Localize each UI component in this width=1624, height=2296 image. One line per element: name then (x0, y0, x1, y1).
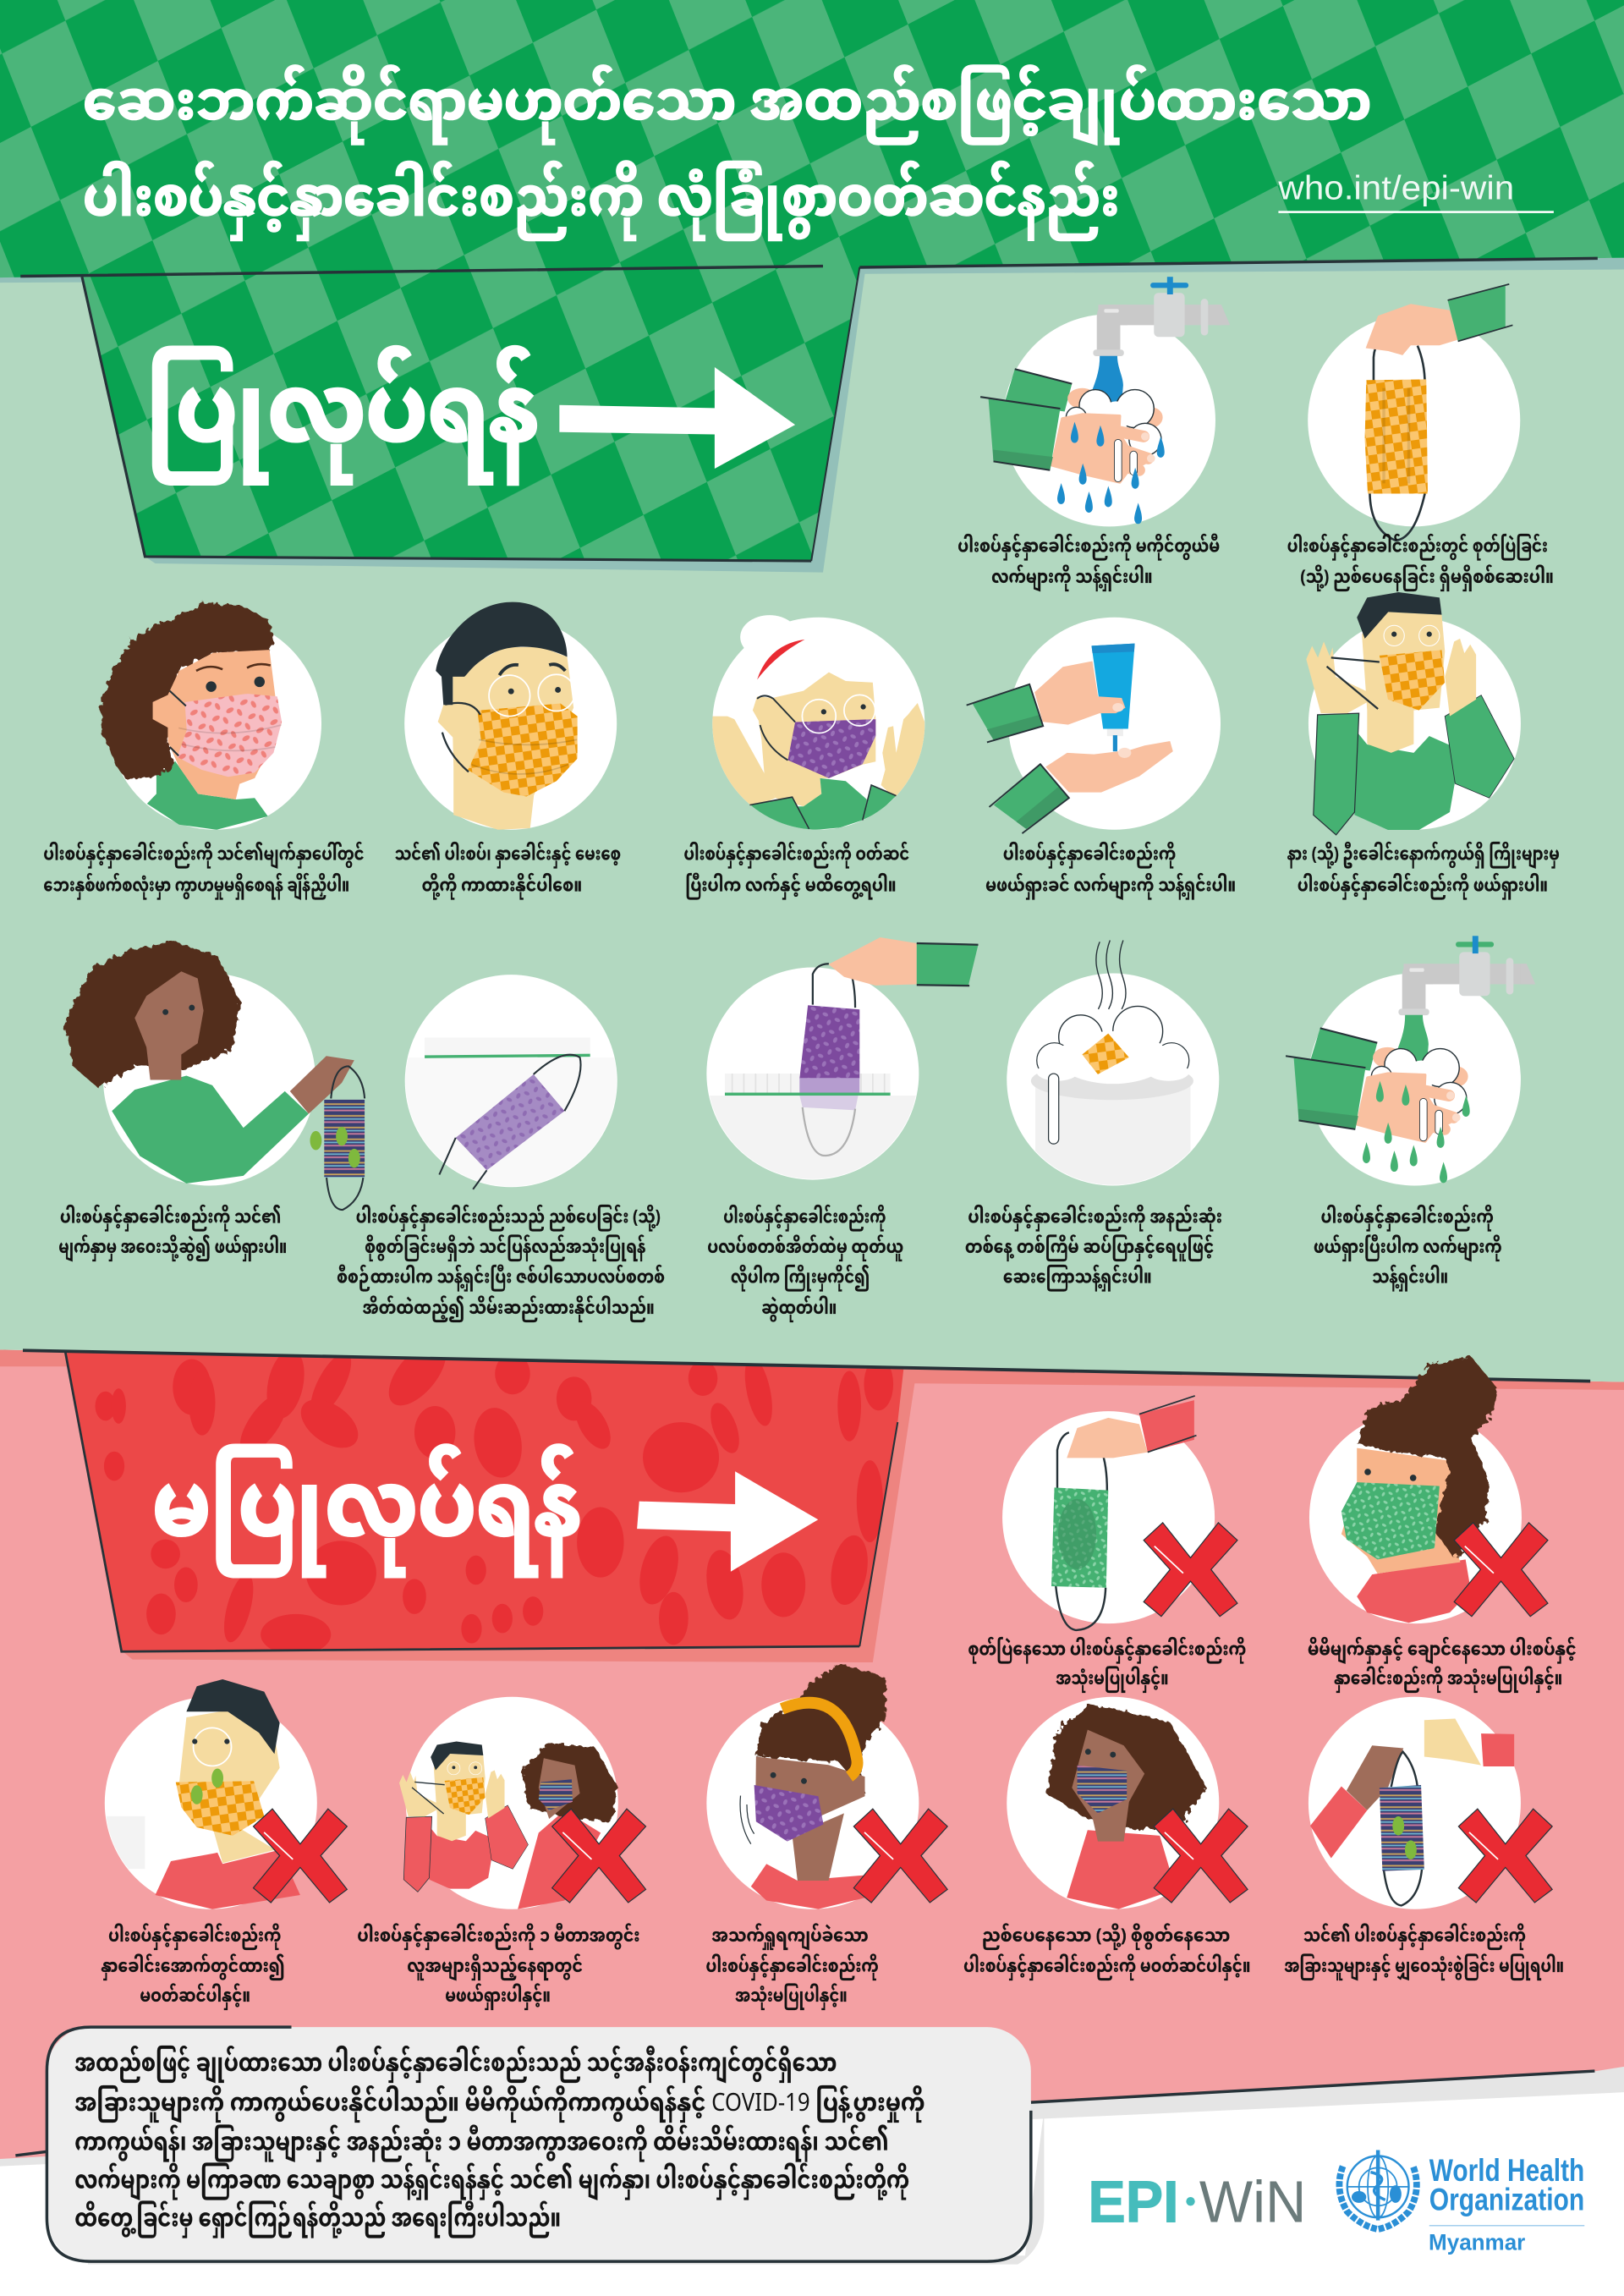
caption: do not wear below nose: မဝတ်ဆင်ပါနှင့်။ (140, 1977, 250, 2018)
illustration: bucket of soapy water (1007, 941, 1219, 1194)
panel: note box: လက်များကို မကြာခဏ သေချာစွာ သန့်ရှင်းရန်နှင့် သင်၏ မျက်နှာ၊ ပါးစပ်နှင့်နှာခေါင်းစည်းတို့ကို (74, 2156, 909, 2211)
flag edge lines (20, 258, 1598, 277)
caption: do not share mask: သင်၏ ပါးစပ်နှင့်နှာခေါင်းစည်းကို (1303, 1917, 1526, 1958)
caption: cover gaps: ဘေးနှစ်ဖက်စလုံးမှာ ကွာဟမှုမရှိစေရန် ချိန်ညှိပါ။ (43, 867, 349, 908)
illustration: mask in zip bag (405, 975, 617, 1189)
illustration: hard to breathe (706, 1664, 919, 1909)
arrow: don't (637, 1471, 818, 1572)
caption: inspect mask: ပါးစပ်နှင့်နှာခေါင်းစည်းတွင် စုတ်ပြဲခြင်း (1287, 528, 1548, 569)
illustration: woman with pink mask (100, 603, 321, 830)
caption: do not wear dirty or damp mask (963, 1917, 1251, 1988)
caption: store in zip bag (337, 1199, 665, 1330)
panel: don't flag (23, 1332, 1590, 1655)
panel: do flag shadow (145, 266, 864, 573)
caption: do not use loose mask: နှာခေါင်းစည်းကို အသုံးမပြုပါနှင့်။ (1334, 1660, 1562, 1700)
caption: wash daily: ဆေးကြောသန့်ရှင်းပါ။ (1003, 1259, 1152, 1299)
logo: EPI-WIN (1088, 2168, 1306, 2234)
panel: note box: ကာကွယ်ရန်၊ အခြားသူများနှင့် အနည်းဆုံး ၁ မီတာအကွာအဝေးကို ထိမ်းသိမ်းထားရန်၊ သင်၏ (74, 2118, 889, 2172)
illustration: pulling mask from bag (706, 937, 979, 1184)
icon: red cross (254, 1809, 347, 1903)
logo: WHO text (1429, 2152, 1584, 2255)
caption: do not wear dirty or damp mask: ပါးစပ်နှင့်နှာခေါင်းစည်းကို မဝတ်ဆင်ပါနှင့်။ (963, 1947, 1251, 1988)
arrow: do (559, 367, 795, 469)
caption: do not share mask: အခြားသူများနှင့် မျှဝေသုံးစွဲခြင်း မပြုရပါ။ (1284, 1947, 1564, 1988)
caption: pull out from bag: ပါးစပ်နှင့်နှာခေါင်းစည်းကို (723, 1199, 886, 1239)
caption: cover nose chin (395, 835, 621, 908)
illustration: person removing straps (1306, 592, 1521, 835)
caption: remove straps (1287, 835, 1560, 908)
caption: clean hands after removing: ဖယ်ရှားပြီးပါက လက်များကို (1314, 1228, 1502, 1269)
caption: do not use torn mask: စုတ်ပြဲနေသော ပါးစပ်နှင့်နှာခေါင်းစည်းကို (968, 1630, 1246, 1671)
icon: red cross (1154, 1809, 1248, 1903)
icon: red cross (1144, 1523, 1237, 1617)
website link: who.int/epi-win (1277, 169, 1514, 206)
caption: remove away from face: မျက်နှာမှ အဝေးသို့ဆွဲ၍ ဖယ်ရှားပါ။ (58, 1228, 287, 1269)
illustration: man with orange mask (404, 602, 617, 830)
caption: do not touch after wearing: ပြီးပါက လက်နှင့် မထိတွေ့ရပါ။ (685, 867, 897, 908)
pink section shadow band (0, 1349, 1624, 1390)
illustration: older woman with purple mask (711, 615, 925, 831)
icon: red cross (1458, 1809, 1552, 1903)
panel: note box: အခြားသူများကို ကာကွယ်ပေးနိုင်ပါသည်။ မိမိကိုယ်ကိုကာကွယ်ရန်နှင့် COVID-19 ပြန့်ပွားမှုကို (74, 2079, 924, 2133)
logo: EPI-WIN: WiN (1199, 2168, 1306, 2234)
caption: do not wear below nose: ပါးစပ်နှင့်နှာခေါင်းစည်းကို (108, 1917, 281, 1958)
logo: WHO text: World Health (1429, 2152, 1584, 2188)
logo: WHO text: Organization (1429, 2182, 1584, 2217)
title: ဆေးဘက်ဆိုင်ရာမဟုတ်သော အထည်စဖြင့်ချုပ်ထားသော (83, 48, 1372, 167)
panel: green patterned header and do flag (0, 0, 1624, 561)
caption: clean hands before removing: မဖယ်ရှားခင် လက်များကို သန့်ရှင်းပါ။ (985, 867, 1236, 908)
panel: note box (47, 2027, 1044, 2265)
illustration: two people near each other (399, 1697, 618, 1909)
heading: don't: မပြုလုပ်ရန် (152, 1416, 581, 1612)
caption: clean hands after removing: သန့်ရှင်းပါ။ (1372, 1259, 1448, 1299)
logo: EPI-WIN: EPI (1088, 2168, 1179, 2234)
caption: cover gaps (43, 835, 365, 908)
caption: clean hands after removing (1314, 1199, 1502, 1299)
caption: wash daily: ပါးစပ်နှင့်နှာခေါင်းစည်းကို အနည်းဆုံး (968, 1199, 1222, 1239)
caption: store in zip bag: စီစဉ်ထားပါက သန့်ရှင်းပြီး ဇစ်ပါသောပလပ်စတစ် (337, 1259, 665, 1299)
caption: remove away from face (58, 1199, 287, 1269)
caption: cover nose chin: သင်၏ ပါးစပ်၊ နှာခေါင်းနှင့် မေးစေ့ (395, 835, 621, 876)
illustration: mask under nose (102, 1679, 317, 1909)
caption: do not touch after wearing (684, 835, 909, 908)
caption: store in zip bag: ပါးစပ်နှင့်နှာခေါင်းစည်းသည် ညစ်ပေခြင်း (သို့) (356, 1199, 661, 1239)
caption: pull out from bag (707, 1199, 903, 1330)
caption: do not touch after wearing: ပါးစပ်နှင့်နှာခေါင်းစည်းကို ဝတ်ဆင် (684, 835, 909, 876)
caption: do not remove within 1 metre: လူအများရှိသည့်နေရာတွင် (407, 1947, 583, 1988)
caption: pull out from bag: ပလပ်စတစ်အိတ်ထဲမှ ထုတ်ယူ (707, 1228, 903, 1269)
caption: store in zip bag: အိတ်ထဲထည့်၍ သိမ်းဆည်းထားနိုင်ပါသည်။ (363, 1289, 655, 1330)
caption: do not use torn mask (968, 1630, 1246, 1700)
caption: do not use mask that is hard to breathe through: ပါးစပ်နှင့်နှာခေါင်းစည်းကို (705, 1947, 879, 1988)
caption: do not wear below nose: နှာခေါင်းအောက်တွင်ထား၍ (101, 1947, 285, 1988)
green section background (0, 258, 1624, 1381)
caption: inspect mask: (သို့) ညစ်ပေနေခြင်း ရှိမရှိစစ်ဆေးပါ။ (1300, 558, 1554, 599)
icon: red cross (552, 1809, 645, 1903)
caption: pull out from bag: လိုပါက ကြိုးမှကိုင်၍ (731, 1259, 870, 1299)
caption: store in zip bag: စိုစွတ်ခြင်းမရှိဘဲ သင်ပြန်လည်အသုံးပြုရန် (365, 1228, 645, 1269)
icon: red cross (853, 1809, 947, 1903)
illustration: torn green mask (1002, 1396, 1215, 1630)
title: ပါးစပ်နှင့်နှာခေါင်းစည်းကို လုံခြုံစွာဝတ်ဆင်နည်း (83, 145, 1120, 263)
caption: cover gaps: ပါးစပ်နှင့်နှာခေါင်းစည်းကို သင်၏မျက်နှာပေါ်တွင် (43, 835, 365, 876)
caption: do not remove within 1 metre: ပါးစပ်နှင့်နှာခေါင်းစည်းကို ၁ မီတာအတွင်း (357, 1917, 640, 1958)
caption: do not share mask (1284, 1917, 1564, 1988)
caption: clean hands before removing (985, 835, 1236, 908)
caption: wash daily: တစ်နေ့ တစ်ကြိမ် ဆပ်ပြာနှင့်ရေပူဖြင့် (965, 1228, 1214, 1269)
caption: pull out from bag: ဆွဲထုတ်ပါ။ (761, 1289, 837, 1330)
header shadow band (0, 258, 1624, 283)
caption: do not use mask that is hard to breathe through: အသုံးမပြုပါနှင့်။ (735, 1977, 848, 2018)
logo: WHO text: Myanmar (1429, 2229, 1526, 2255)
icon: red cross (1454, 1523, 1548, 1617)
caption: clean hands: လက်များကို သန့်ရှင်းပါ။ (991, 558, 1153, 599)
illustration: woman holding patterned mask (64, 942, 365, 1210)
heading: do: ပြုလုပ်ရန် (146, 317, 539, 522)
caption: remove away from face: ပါးစပ်နှင့်နှာခေါင်းစည်းကို သင်၏ (60, 1199, 281, 1239)
caption: remove straps: နား (သို့) ဦးခေါင်းနောက်ကွယ်ရှိ ကြိုးများမှ (1287, 835, 1560, 876)
caption: do not remove within 1 metre: မဖယ်ရှားပါနှင့်။ (445, 1977, 551, 2018)
gray band under pink section (0, 2065, 1624, 2167)
caption: do not use loose mask (1308, 1630, 1577, 1700)
caption: do not wear below nose (101, 1917, 285, 2018)
caption: wash daily (965, 1199, 1222, 1299)
illustration: sharing a mask (1309, 1697, 1521, 1909)
title (83, 48, 1372, 263)
panel: note box: ထိတွေ့ခြင်းမှ ရှောင်ကြဉ်ရန်တို့သည် အရေးကြီးပါသည်။ (74, 2194, 561, 2249)
caption: do not use mask that is hard to breathe through (705, 1917, 879, 2018)
illustration: dirty or damp mask (1007, 1697, 1219, 1909)
caption: do not use torn mask: အသုံးမပြုပါနှင့်။ (1056, 1660, 1169, 1700)
illustration: loose mask (1309, 1356, 1522, 1623)
caption: inspect mask (1287, 528, 1554, 599)
panel: note box: အထည်စဖြင့် ချုပ်ထားသော ပါးစပ်နှင့်နှာခေါင်းစည်းသည် သင့်အနီးဝန်းကျင်တွင်ရှိသော (74, 2039, 837, 2093)
line at bottom of pink section (15, 2071, 1594, 2156)
caption: cover nose chin: တို့ကို ကာထားနိုင်ပါစေ။ (422, 867, 582, 908)
illustration: washing hands with green water (1286, 936, 1535, 1185)
caption: do not wear dirty or damp mask: ညစ်ပေနေသော (သို့) စိုစွတ်နေသော (982, 1917, 1230, 1958)
caption: clean hands before removing: ပါးစပ်နှင့်နှာခေါင်းစည်းကို (1003, 835, 1176, 876)
caption: clean hands: ပါးစပ်နှင့်နှာခေါင်းစည်းကို မကိုင်တွယ်မီ (957, 528, 1220, 569)
pink section background (0, 1354, 1624, 2159)
panel: don't flag shadow (122, 1370, 914, 1662)
caption: do not remove within 1 metre (357, 1917, 640, 2018)
caption: clean hands (957, 528, 1220, 599)
illustration: inspect orange mask (1308, 284, 1520, 541)
caption: remove straps: ပါးစပ်နှင့်နှာခေါင်းစည်းကို ဖယ်ရှားပါ။ (1298, 867, 1548, 908)
illustration: washing hands with blue water (980, 277, 1230, 526)
caption: clean hands after removing: ပါးစပ်နှင့်နှာခေါင်းစည်းကို (1321, 1199, 1494, 1239)
logo: WHO emblem (1339, 2150, 1417, 2229)
caption: do not use mask that is hard to breathe through: အသက်ရှူရကျပ်ခဲသော (711, 1917, 869, 1958)
caption: do not use loose mask: မိမိမျက်နှာနှင့် ချောင်နေသော ပါးစပ်နှင့် (1308, 1630, 1577, 1671)
illustration: hand sanitiser tube (967, 618, 1221, 833)
